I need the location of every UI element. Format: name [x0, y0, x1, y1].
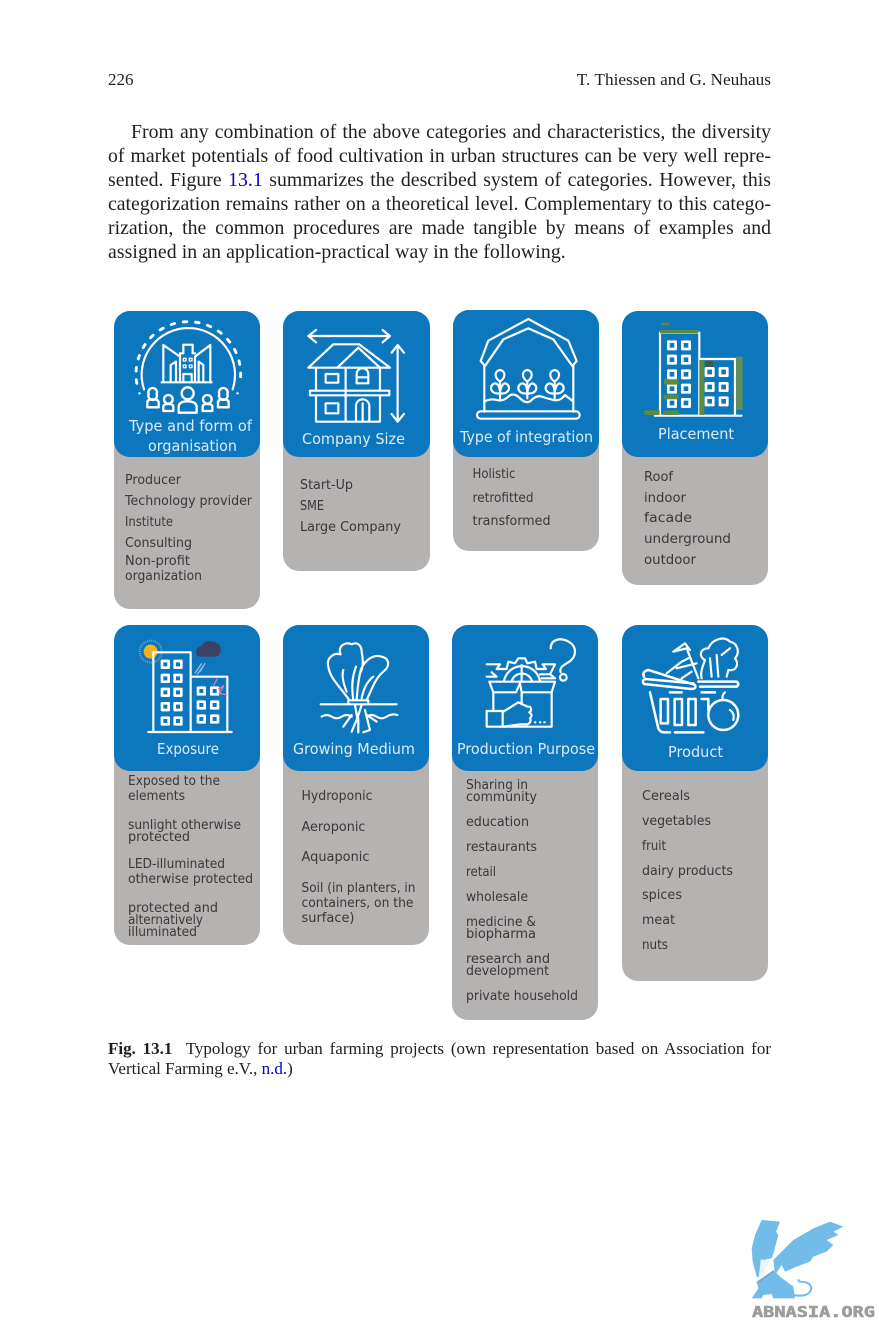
list: facade [644, 511, 692, 526]
list: Institute [125, 515, 173, 530]
list: education [466, 815, 529, 830]
list: illuminated [128, 925, 197, 940]
list: vegetables [642, 814, 711, 829]
heading: Company Size [302, 430, 405, 448]
heading: Exposure [157, 740, 219, 758]
list: Start-Up [300, 478, 353, 493]
icon: building with greenery [644, 323, 743, 416]
heading [128, 417, 253, 455]
body paragraph: sented. Figure 13.1 summarizes the described system of categories. However, this [108, 169, 771, 191]
icon: box, gear and question mark [487, 639, 575, 727]
list: containers, on the [302, 896, 414, 911]
list: Holistic [472, 467, 516, 482]
list [472, 467, 550, 529]
body paragraph: From any combination of the above categories and characteristics, the diversity [131, 121, 771, 143]
heading: organisation [148, 437, 237, 455]
list: spices [642, 888, 682, 903]
list: surface) [302, 911, 354, 926]
body paragraph: categorization remains rather on a theoretical level. Complementary to this catego- [108, 193, 771, 215]
list: biopharma [466, 927, 536, 942]
list [128, 774, 253, 940]
running head authors: T. Thiessen and G. Neuhaus [577, 70, 771, 89]
figure caption [108, 1039, 771, 1078]
heading: Production Purpose [457, 740, 595, 758]
heading: Product [668, 743, 723, 761]
list: LED-illuminated [128, 857, 225, 872]
list: Exposed to the [128, 774, 220, 789]
list: Hydroponic [302, 789, 372, 804]
icon: basket of produce [643, 639, 738, 732]
list: organization [125, 569, 202, 584]
list: medicine & [466, 915, 536, 930]
card: type and form of organisation [114, 311, 260, 609]
card: type of integration [453, 310, 599, 551]
list: Sharing in [466, 778, 528, 793]
list: Aquaponic [302, 850, 370, 865]
figure: typology cards [114, 310, 768, 1020]
page number: 226 [108, 70, 134, 89]
list [300, 478, 401, 535]
list [644, 470, 731, 568]
list: transformed [472, 514, 550, 529]
list [302, 789, 416, 926]
watermark logo [752, 1220, 875, 1321]
list: Non-profit [125, 554, 190, 569]
card: placement [622, 311, 768, 585]
list: protected and [128, 901, 218, 916]
list: Soil (in planters, in [302, 881, 416, 896]
list: Aeroponic [302, 820, 366, 835]
body paragraph: assigned in an application-practical way in the following. [108, 241, 566, 263]
card: company size [283, 311, 430, 571]
icon: greenhouse with plants [477, 319, 580, 419]
card: exposure [114, 625, 260, 945]
list: research and [466, 952, 550, 967]
list [124, 473, 252, 584]
list: private household [466, 989, 578, 1004]
figure caption: Vertical Farming e.V., n.d.) [108, 1059, 293, 1078]
list: protected [128, 830, 190, 845]
list: underground [644, 532, 731, 547]
card: product [622, 625, 768, 981]
list: fruit [642, 839, 666, 854]
list: Consulting [125, 536, 192, 551]
watermark text: ABNASIA.ORG [752, 1303, 875, 1321]
list: dairy products [642, 864, 733, 879]
list: Roof [644, 470, 673, 485]
list: Large Company [300, 520, 401, 535]
list: otherwise protected [128, 872, 253, 887]
heading: Growing Medium [293, 740, 415, 758]
list: nuts [642, 938, 668, 953]
griffin mark [752, 1220, 843, 1298]
heading: Type and form of [128, 417, 253, 435]
list: Technology provider [124, 494, 252, 509]
icon: building with sun and storm [140, 641, 232, 732]
icon: plant with roots [321, 643, 397, 732]
card: production purpose [452, 625, 598, 1020]
list: restaurants [466, 840, 537, 855]
list [466, 778, 578, 1004]
card: growing medium [283, 625, 429, 945]
list: retail [466, 865, 496, 880]
body paragraph [108, 121, 771, 263]
list: Cereals [642, 789, 690, 804]
list: indoor [644, 491, 687, 506]
list: sunlight otherwise [128, 818, 241, 833]
list: development [466, 964, 549, 979]
figure caption: Fig. 13.1 Typology for urban farming projects (own representation based on Association for [108, 1039, 771, 1058]
heading: Placement [658, 425, 734, 443]
icon: house with dimension arrows [308, 330, 404, 422]
list: alternatively [128, 913, 203, 928]
list: elements [128, 789, 185, 804]
heading: Type of integration [459, 428, 593, 446]
body paragraph: rization, the common procedures are made tangible by means of examples and [108, 217, 771, 239]
body paragraph: of market potentials of food cultivation in urban structures can be very well repre- [108, 145, 771, 167]
list: wholesale [466, 890, 528, 905]
list: meat [642, 913, 675, 928]
list: outdoor [644, 553, 697, 568]
list [642, 789, 733, 953]
icon: buildings and people [136, 322, 241, 413]
list: retrofitted [472, 491, 534, 506]
list: SME [300, 499, 324, 514]
list: community [466, 790, 537, 805]
list: Producer [125, 473, 182, 488]
